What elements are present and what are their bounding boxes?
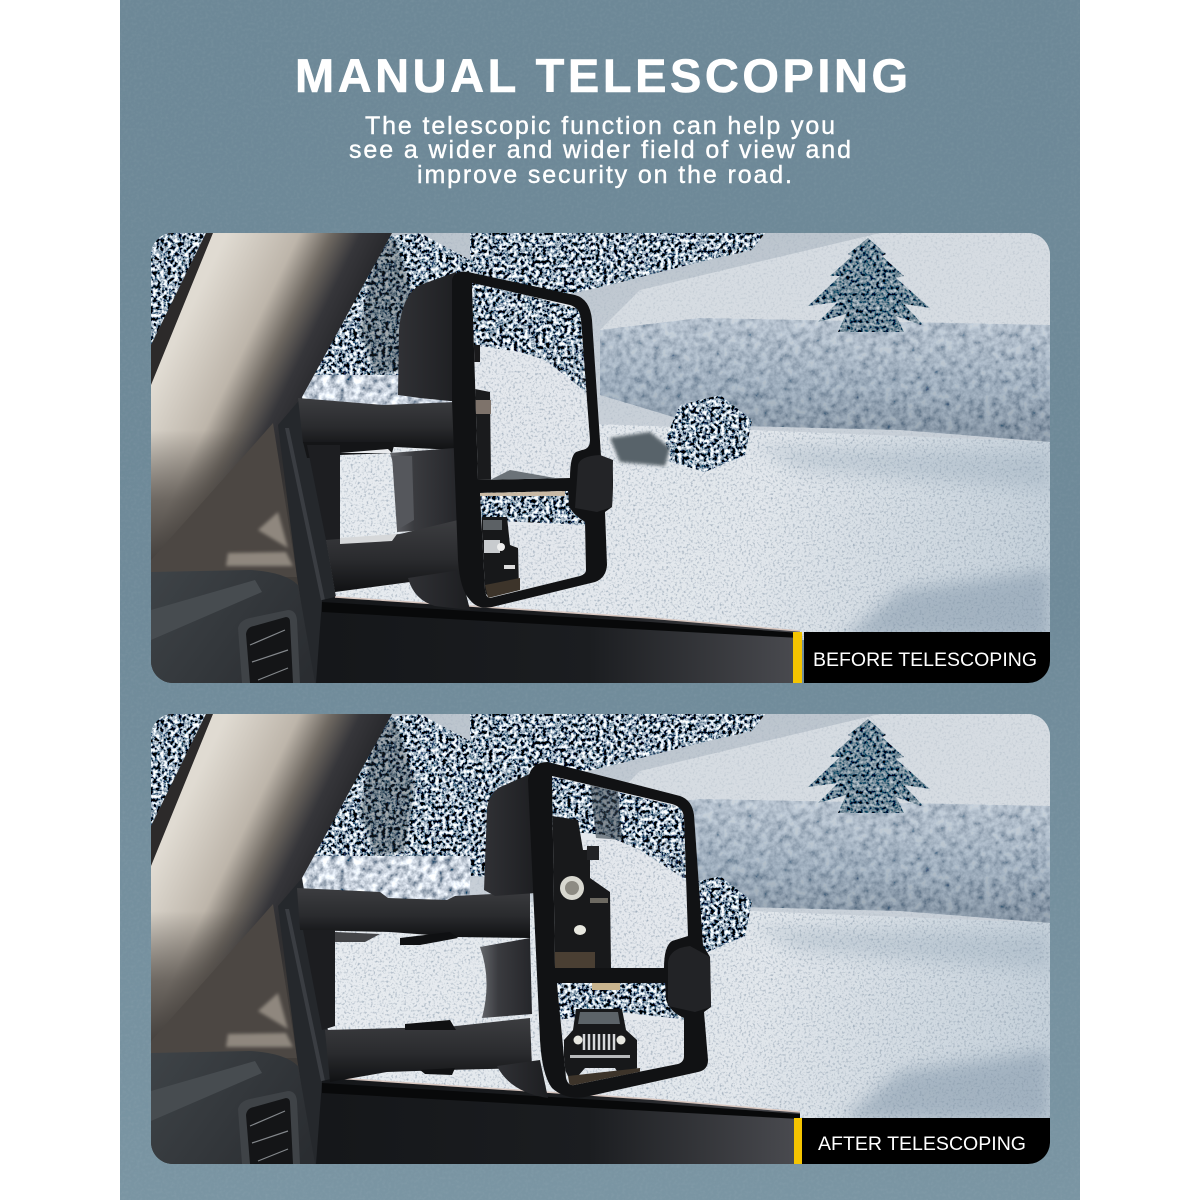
intro text: The telescopic function can help you — [365, 112, 835, 140]
title: MANUAL TELESCOPING — [295, 49, 908, 102]
truck interior and window frame — [151, 714, 800, 1164]
mirror frame — [528, 762, 711, 1098]
background panel — [120, 0, 1080, 1200]
intro text — [349, 112, 851, 189]
mirror housing — [398, 272, 470, 610]
panel: before telescoping — [151, 233, 1050, 683]
extended mirror arms — [297, 888, 532, 1082]
mirror tow tab — [668, 946, 711, 1012]
snowy landscape — [151, 714, 1050, 1121]
panel: after telescoping — [151, 714, 1050, 1164]
mirror arms — [298, 398, 460, 592]
label: after telescoping — [794, 1118, 1050, 1164]
lower mirror glass — [557, 983, 684, 1086]
mirror frame — [452, 272, 613, 608]
mirror tow tab — [575, 455, 613, 512]
lower mirror glass — [478, 490, 590, 600]
label: after telescoping: AFTER TELESCOPING — [818, 1133, 1026, 1155]
label: before telescoping — [793, 632, 1050, 683]
intro text: improve security on the road. — [417, 161, 792, 189]
snowy landscape — [151, 233, 1050, 640]
upper mirror glass — [472, 283, 590, 480]
intro text: see a wider and wider field of view and — [349, 136, 851, 164]
upper mirror glass — [548, 772, 693, 972]
label: before telescoping: BEFORE TELESCOPING — [813, 649, 1037, 671]
truck interior and window frame — [151, 233, 800, 683]
mirror housing — [484, 773, 548, 1098]
